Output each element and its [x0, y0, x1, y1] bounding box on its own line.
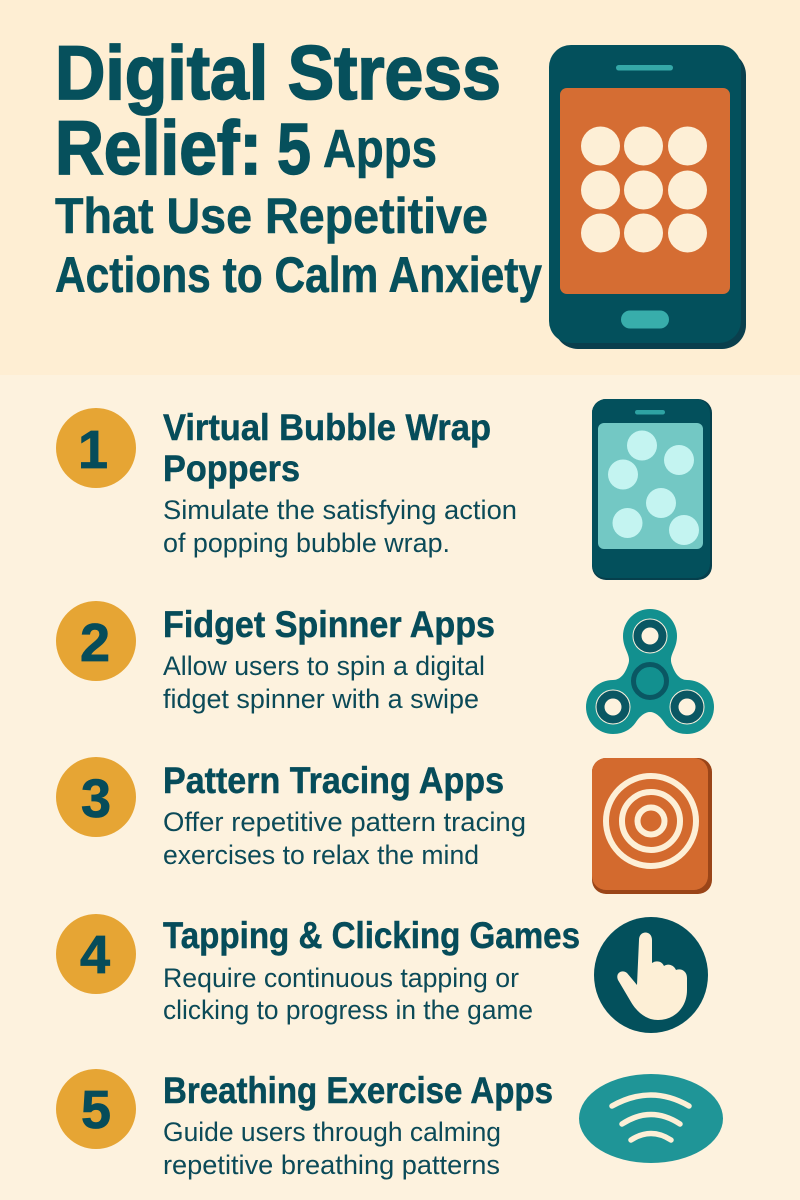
number badge 4: 4 — [80, 925, 110, 985]
number badge 5: 5 — [81, 1080, 111, 1140]
heading: virtual bubble wrap poppers: Poppers — [163, 448, 300, 489]
panel: item 1 virtual bubble wrap poppers — [56, 399, 712, 580]
icon: fidget spinner — [586, 609, 714, 734]
description: item 5: Guide users through calming — [163, 1117, 501, 1147]
description: item 2: fidget spinner with a swipe — [163, 684, 479, 714]
heading: tapping and clicking games: Tapping & Clicking Games — [163, 915, 580, 956]
description: item 2 — [163, 651, 485, 714]
description: item 3: Offer repetitive pattern tracing — [163, 807, 526, 837]
description: item 3: exercises to relax the mind — [163, 840, 479, 870]
number badge 5 — [56, 1069, 136, 1149]
description: item 4: clicking to progress in the game — [163, 995, 533, 1025]
title: Apps — [323, 119, 437, 179]
panel: header — [55, 31, 746, 349]
number badge 2: 2 — [80, 613, 110, 673]
title — [55, 31, 542, 303]
title: Digital Stress — [55, 31, 501, 116]
icon: concentric circle pattern tile — [592, 758, 712, 894]
panel: item 5 breathing exercise apps — [56, 1069, 723, 1180]
heading: breathing exercise apps: Breathing Exercise Apps — [163, 1070, 553, 1111]
icon: tapping hand — [594, 917, 708, 1033]
icon: large phone with dot grid — [549, 45, 746, 349]
heading: pattern tracing apps: Pattern Tracing Apps — [163, 760, 504, 801]
title: Actions to Calm Anxiety — [55, 247, 542, 303]
title: 5 — [277, 110, 311, 190]
panel: item 3 pattern tracing apps — [56, 757, 712, 894]
description: item 4: Require continuous tapping or — [163, 963, 519, 993]
title: Relief: — [55, 106, 262, 191]
panel: item 4 tapping and clicking games — [56, 914, 708, 1033]
heading: virtual bubble wrap poppers: Virtual Bubble Wrap — [163, 407, 491, 448]
description: item 1 — [163, 495, 517, 558]
heading: fidget spinner apps: Fidget Spinner Apps — [163, 604, 495, 645]
description: item 1: Simulate the satisfying action — [163, 495, 517, 525]
number badge 3 — [56, 757, 136, 837]
number badge 4 — [56, 914, 136, 994]
description: item 5: repetitive breathing patterns — [163, 1150, 500, 1180]
number badge 1 — [56, 408, 136, 488]
panel: item 2 fidget spinner apps — [56, 601, 714, 734]
number badge 3: 3 — [81, 769, 111, 829]
icon: phone with bubbles — [592, 399, 712, 580]
title: That Use Repetitive — [55, 188, 488, 244]
description: item 5 — [163, 1117, 501, 1180]
description: item 4 — [163, 963, 533, 1025]
number badge 2 — [56, 601, 136, 681]
icon: breathing waves — [579, 1074, 723, 1163]
number badge 1: 1 — [78, 420, 108, 480]
description: item 1: of popping bubble wrap. — [163, 528, 450, 558]
description: item 2: Allow users to spin a digital — [163, 651, 485, 681]
description: item 3 — [163, 807, 526, 870]
heading: virtual bubble wrap poppers — [163, 407, 491, 489]
